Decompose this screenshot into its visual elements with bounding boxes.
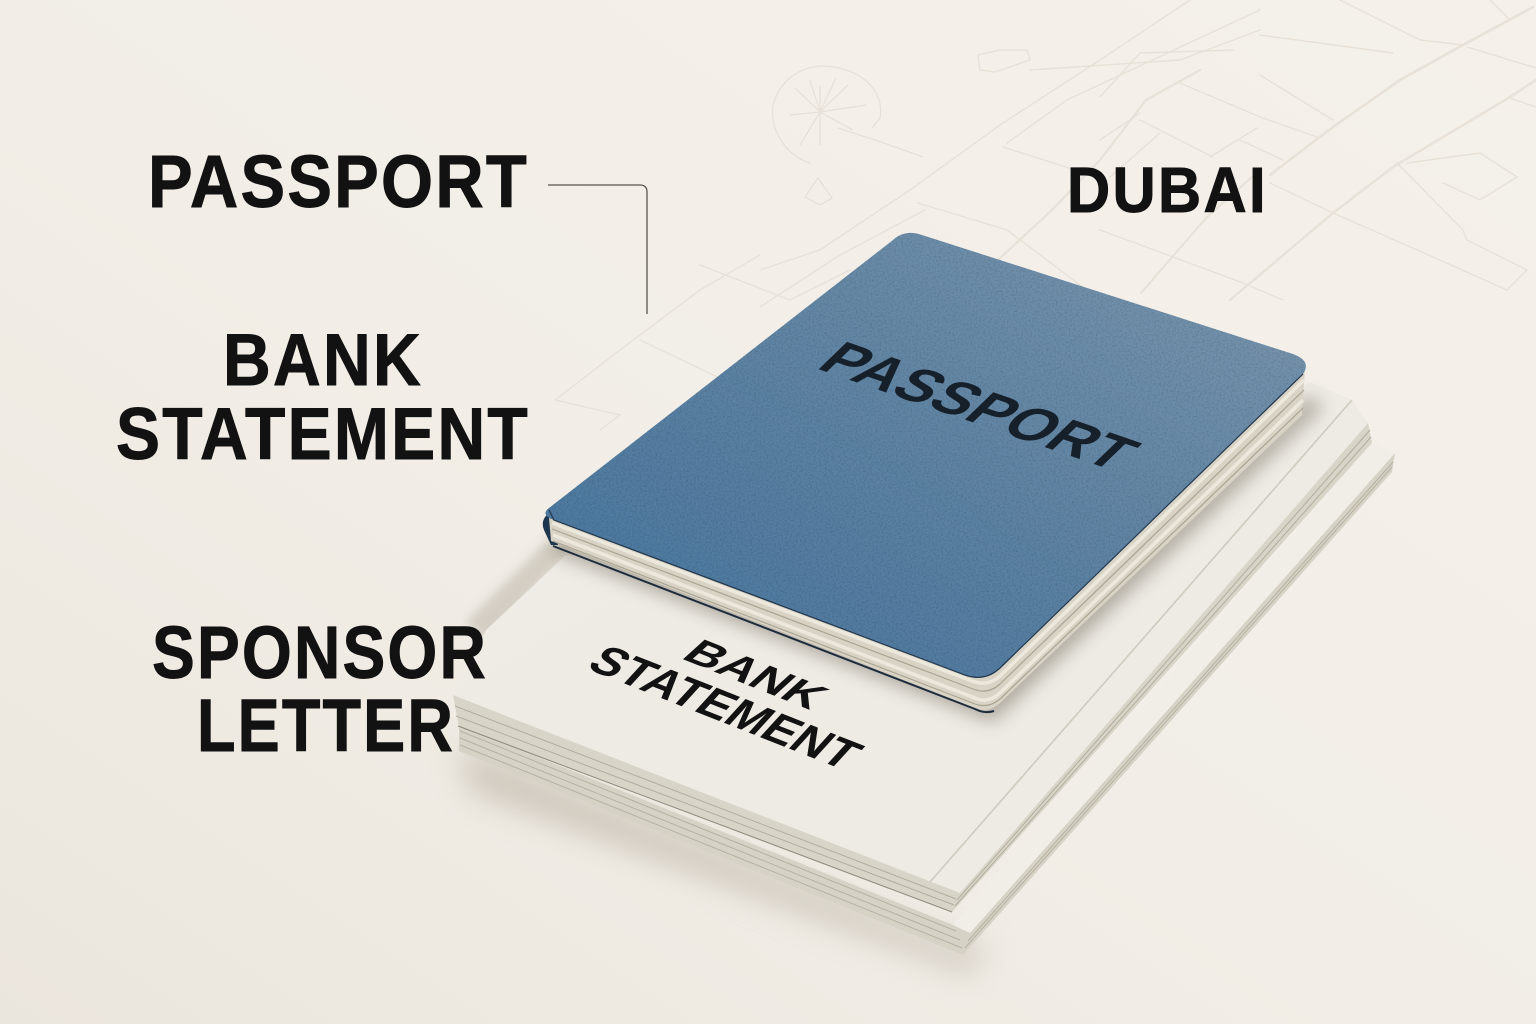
passport pages xyxy=(549,368,1305,710)
label: BANK STATEMENT: BANK xyxy=(223,320,423,401)
passport cover text: PASSPORT xyxy=(806,333,1151,480)
label: BANK STATEMENT: STATEMENT xyxy=(116,394,530,475)
bottom block side xyxy=(459,453,1395,955)
dark lower edge line xyxy=(553,546,994,712)
top block side xyxy=(453,423,1372,912)
leader line from PASSPORT label xyxy=(548,185,647,314)
paper stack xyxy=(453,382,1395,955)
passport shadow on paper xyxy=(553,395,1322,722)
title label: DUBAI: DUBAI xyxy=(1067,154,1268,226)
title label: PASSPORT: PASSPORT xyxy=(148,140,529,223)
sheet crease line xyxy=(930,400,1352,882)
label: SPONSOR LETTER xyxy=(152,611,488,767)
top sheet face xyxy=(453,382,1368,893)
cast shadow left of passport xyxy=(466,543,578,642)
faint Palm Jumeirah outline xyxy=(773,66,923,163)
navy spine end xyxy=(543,513,558,545)
bank statement paper text: STATEMENT xyxy=(578,637,873,778)
blue cover xyxy=(545,233,1306,677)
page light bands xyxy=(552,380,1304,700)
cover dark lower edges xyxy=(549,374,1303,677)
label: SPONSOR LETTER: LETTER xyxy=(197,684,455,767)
label: BANK STATEMENT xyxy=(116,320,530,475)
passport booklet xyxy=(543,233,1306,712)
bottom block top face xyxy=(953,443,1395,933)
page shadow lines xyxy=(552,390,1304,706)
top block page lines xyxy=(455,430,1371,912)
label: SPONSOR LETTER: SPONSOR xyxy=(152,611,488,694)
bank statement paper text: BANK xyxy=(673,632,838,716)
bottom block page lines xyxy=(460,462,1393,948)
faint Dubai street map xyxy=(555,0,1536,430)
stack shadow xyxy=(459,745,985,975)
